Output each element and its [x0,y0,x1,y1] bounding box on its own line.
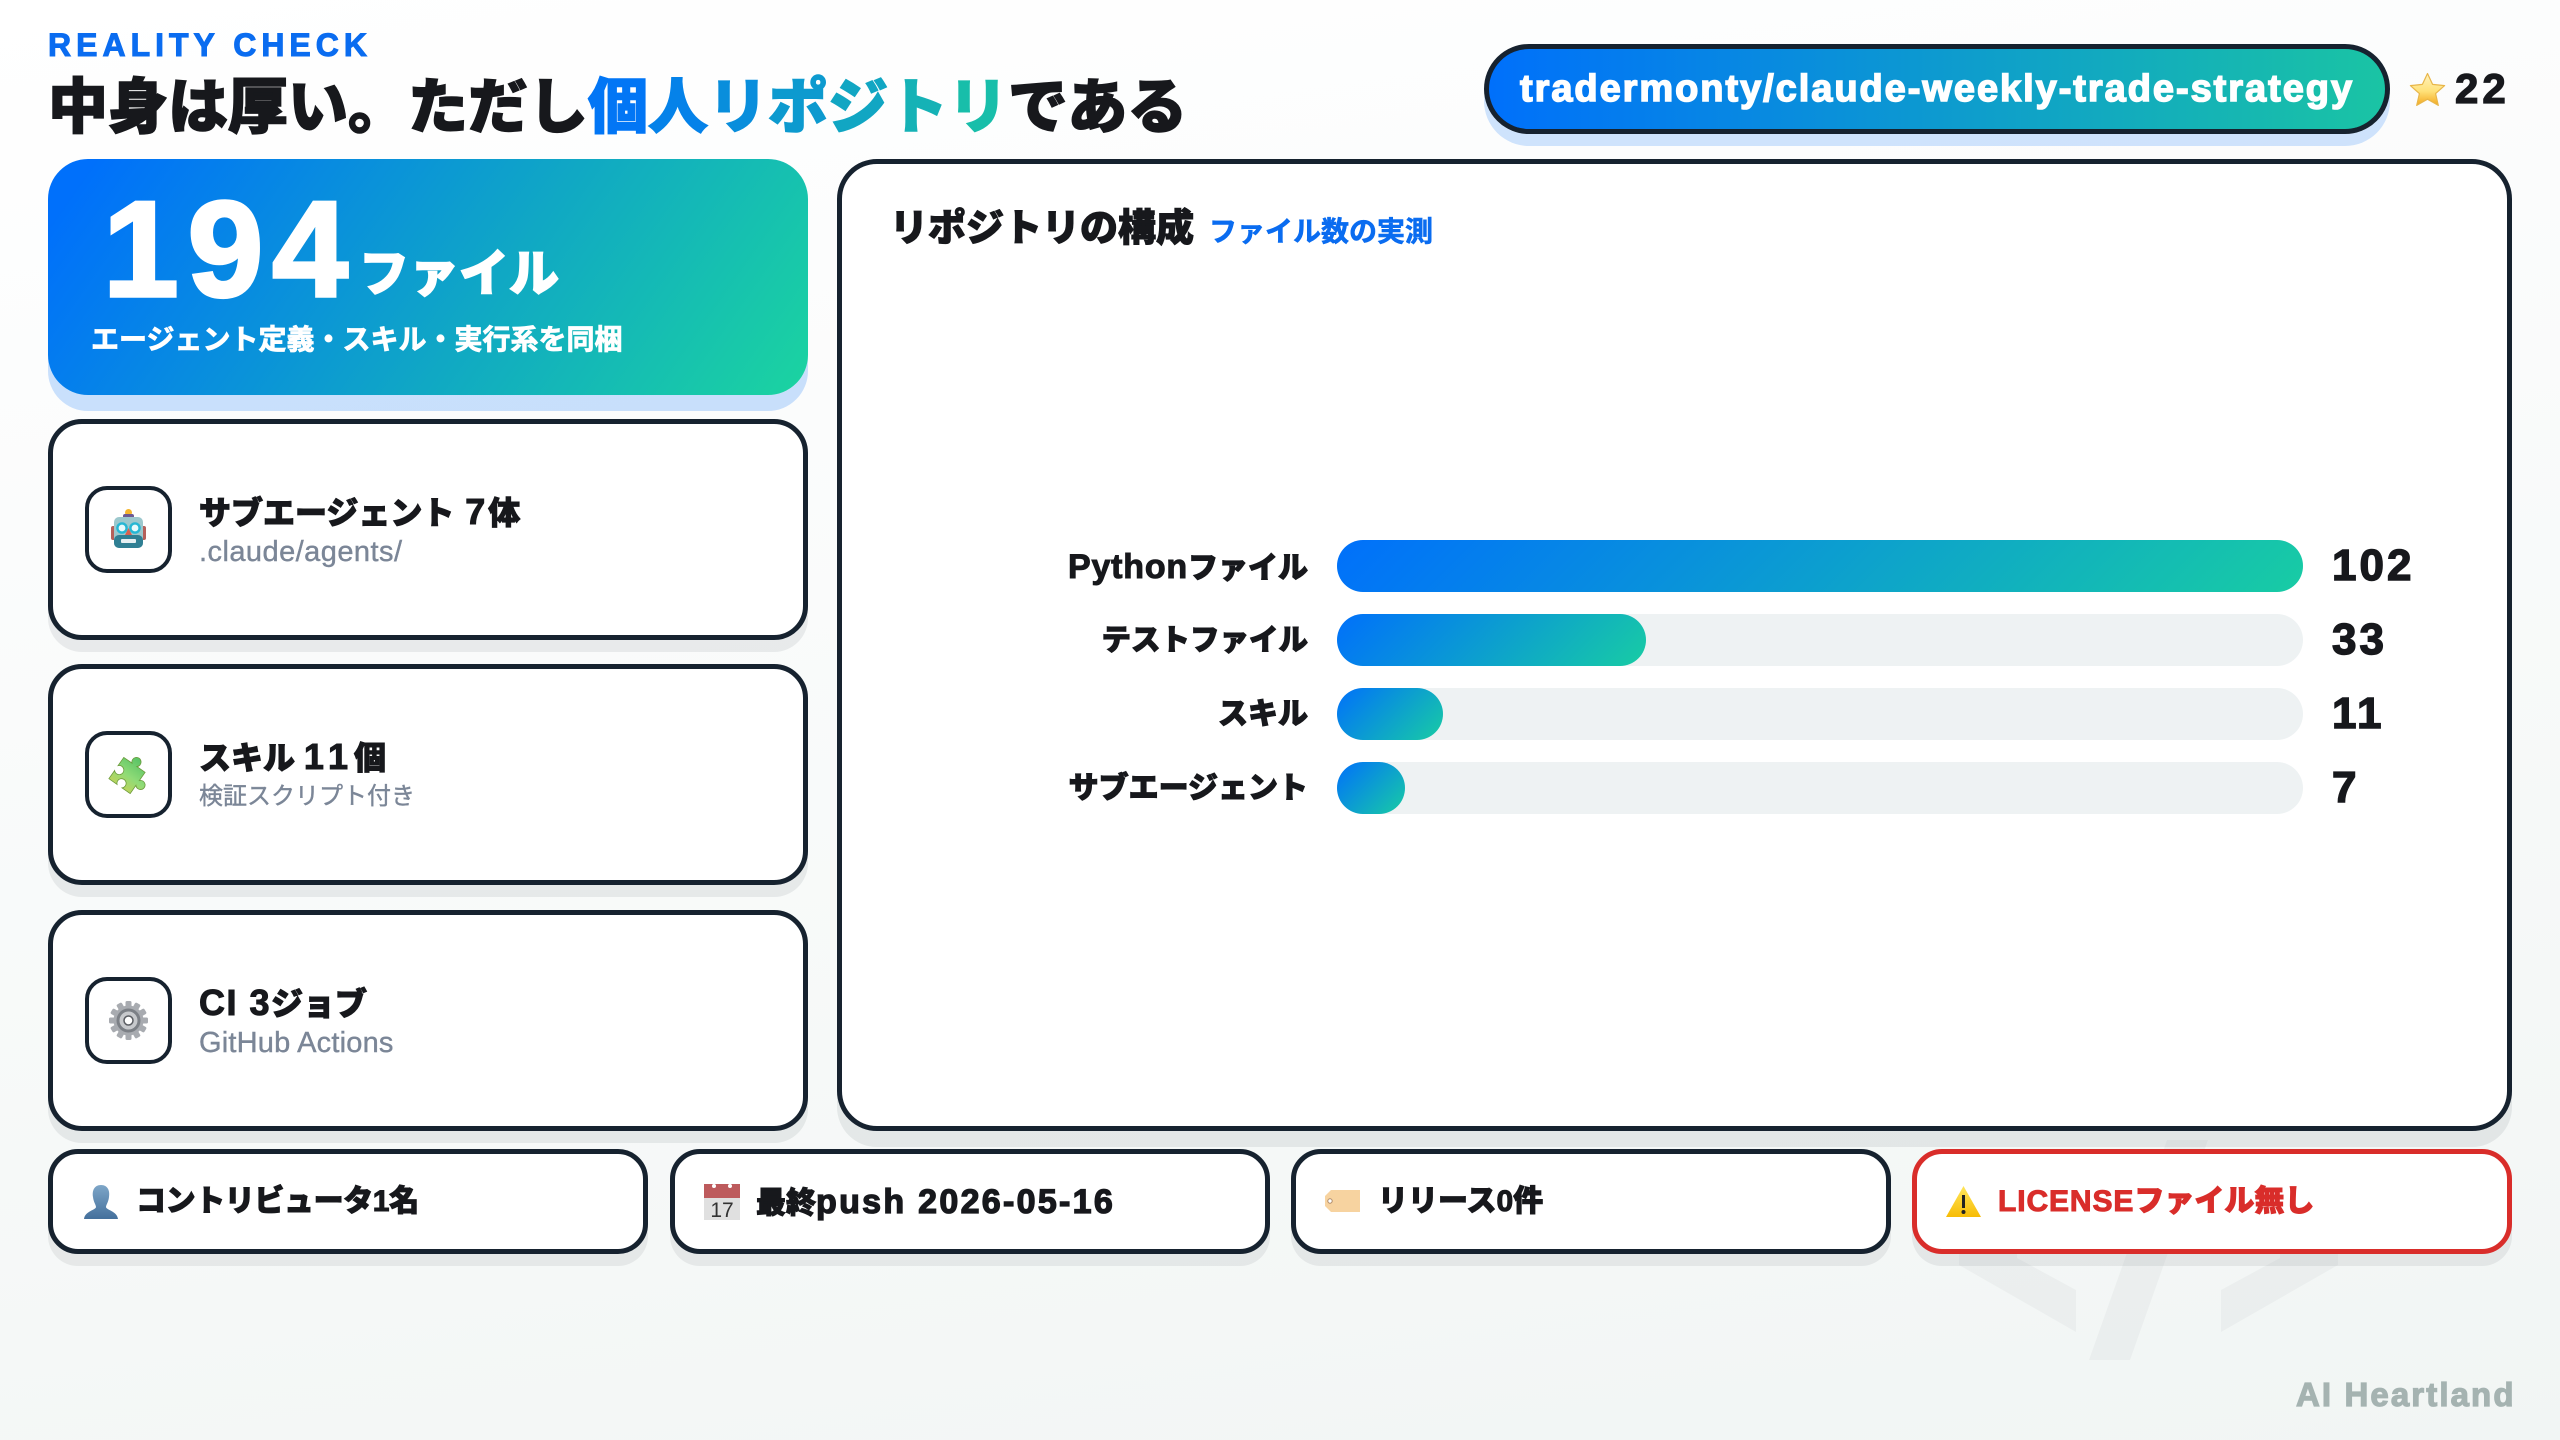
bar: subagent [1337,762,2303,814]
icon: star [2410,72,2446,106]
hero number: 194 [103,173,357,325]
panel: repository composition [837,159,2512,1131]
bar label: skill: スキル [1218,698,1308,731]
bar: test [1337,614,2303,666]
chip text: 最終push 2026-05-16 [756,1183,1115,1221]
panel: total files hero [48,159,808,395]
icon: warning [1946,1186,1981,1217]
icon: puzzle [85,731,172,818]
hero unit: ファイル [359,246,559,302]
repo name: tradermonty/claude-weekly-trade-strategy [1520,68,2354,110]
chip text: LICENSEファイル無し [1998,1185,2314,1218]
card: skills [48,664,808,885]
card subtitle: .claude/agents/ [199,536,402,568]
card title: サブエージェント 7体 [199,491,520,532]
repo pill [1484,44,2390,134]
chip: last push [670,1149,1270,1254]
card: CI [48,910,808,1131]
icon: robot [85,486,172,573]
bar value: 33: 33 [2332,615,2387,664]
bar label: test: テストファイル [1101,624,1308,657]
bar value: 102: 102 [2332,541,2414,590]
chip text: コントリビュータ1名 [136,1185,419,1218]
panel subheading: ファイル数の実測 [1209,216,1433,247]
bar: Python [1337,540,2303,592]
bar value: 11: 11 [2332,689,2385,738]
icon: calendar [704,1184,740,1220]
eyebrow: REALITY CHECK: REALITY CHECK [48,27,372,63]
icon: gear [85,977,172,1064]
card title: スキル 11個 [199,736,386,777]
card title: CI 3ジョブ [199,982,367,1023]
card subtitle: GitHub Actions [199,1027,394,1059]
chip: license warning [1912,1149,2512,1254]
icon: tag [1325,1190,1360,1212]
icon: person [84,1185,118,1219]
chip: releases [1291,1149,1891,1254]
star count: 22 [2455,65,2510,112]
hero caption: エージェント定義・スキル・実行系を同梱 [91,324,622,355]
title: 中身は厚い。ただし個人リポジトリである [48,74,1187,141]
chip: contributors [48,1149,648,1254]
card subtitle: 検証スクリプト付き [199,783,415,810]
bar value: 7: 7 [2332,763,2359,812]
bar chart [1068,540,2414,814]
card: subagents [48,419,808,640]
panel heading: リポジトリの構成 [890,208,1194,250]
chip text: リリース0件 [1378,1185,1543,1218]
bar: skill [1337,688,2303,740]
watermark: code symbol [1940,1130,2360,1370]
bar label: subagent: サブエージェント [1069,772,1308,805]
bar label: Python: Pythonファイル [1068,548,1308,586]
brand: AI Heartland [2296,1376,2516,1413]
